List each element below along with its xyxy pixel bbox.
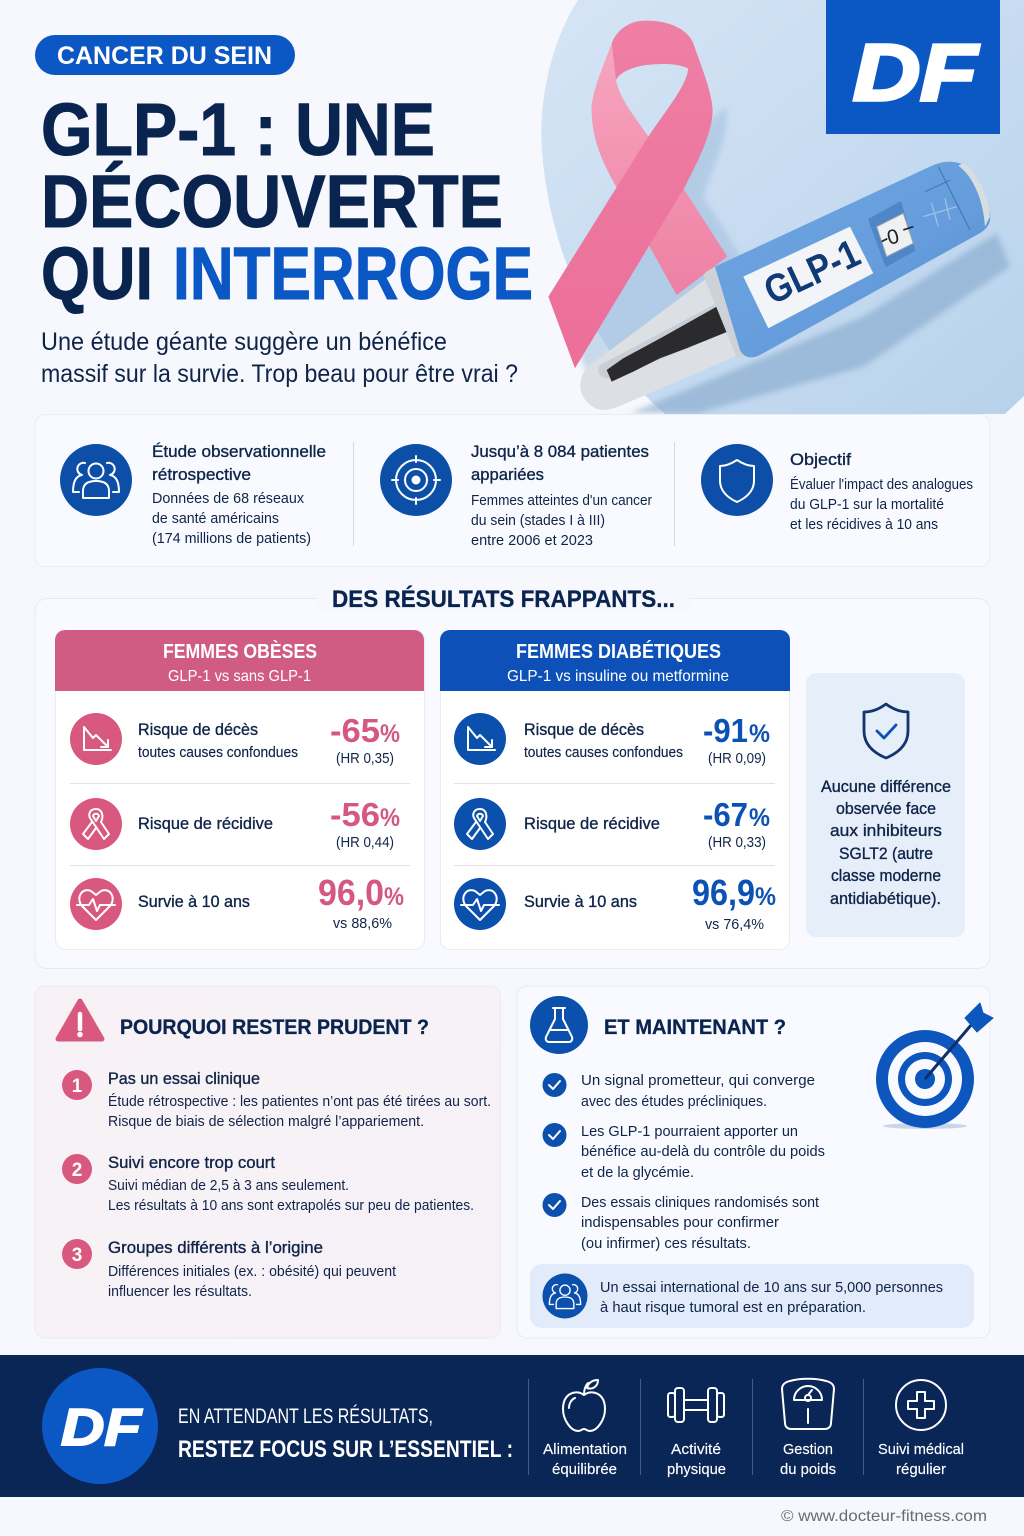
- row: death risk, diabetic: toutes causes confondues: [524, 745, 683, 761]
- callout: SGLT2 note: classe moderne: [831, 867, 941, 885]
- icon: injection pen: [580, 162, 1010, 413]
- title: GLP-1 : UNE: [41, 88, 435, 171]
- fact: observational study: rétrospective: [152, 465, 251, 484]
- point: beyond weight and glycaemia: bénéfice au-delà du contrôle du poids: [581, 1143, 825, 1160]
- callout: upcoming international trial: Un essai international de 10 ans sur 5,000 personnes: [600, 1279, 943, 1296]
- item: weight management: du poids: [780, 1461, 836, 1478]
- callout: upcoming international trial: [530, 1264, 974, 1328]
- row: 10-year survival, diabetic: %: [755, 883, 776, 911]
- callout: SGLT2 note: [806, 673, 965, 937]
- fact: observational study: [60, 442, 326, 547]
- fact: matched patients: appariées: [471, 465, 544, 484]
- icon: shield check: [864, 704, 908, 758]
- point 3: Différences initiales (ex. : obésité) qui peuvent: [108, 1264, 396, 1280]
- fact: objective: Évaluer l'impact des analogues: [790, 476, 973, 493]
- item: medical follow-up: régulier: [896, 1461, 946, 1478]
- row: 10-year survival, diabetic: vs 76,4%: [705, 917, 764, 933]
- point: beyond weight and glycaemia: et de la glycémie.: [581, 1164, 694, 1181]
- fact: objective: du GLP-1 sur la mortalité: [790, 497, 944, 513]
- point 3: influencer les résultats.: [108, 1284, 252, 1300]
- panel: what now: [517, 986, 993, 1338]
- title: [41, 88, 533, 315]
- callout: SGLT2 note: Aucune différence: [821, 778, 951, 796]
- item: weight management: [780, 1379, 836, 1478]
- fact: matched patients: du sein (stades I à III): [471, 513, 605, 529]
- icon: flask: [530, 996, 588, 1054]
- row: death risk, diabetic: -91: [703, 712, 748, 749]
- item: weight management: Gestion: [783, 1441, 833, 1458]
- row: recurrence risk, obese: (HR 0,44): [336, 835, 394, 851]
- footer message: [178, 1405, 513, 1463]
- point: randomised trials needed: Des essais cliniques randomisés sont: [581, 1194, 820, 1211]
- icon: injection pen: GLP-1: [758, 231, 867, 313]
- row: recurrence risk, diabetic: Risque de récidive: [524, 814, 660, 833]
- fact: matched patients: entre 2006 et 2023: [471, 533, 593, 549]
- heading: why be cautious: POURQUOI RESTER PRUDENT ?: [120, 1016, 429, 1039]
- logo: DF square: DF: [853, 28, 979, 117]
- row: recurrence risk, diabetic: %: [749, 804, 770, 832]
- callout: SGLT2 note: aux inhibiteurs: [830, 822, 942, 840]
- point 2: 2: [72, 1160, 82, 1181]
- row: 10-year survival, obese: %: [384, 883, 404, 911]
- fact: observational study: (174 millions de patients): [152, 531, 311, 547]
- row: death risk, diabetic: [454, 712, 770, 767]
- fact: matched patients: [380, 442, 652, 549]
- point 1: Étude rétrospective : les patientes n’ont pas été tirées au sort.: [108, 1093, 491, 1110]
- logo: DF square: [826, 0, 1000, 134]
- point 1: Risque de biais de sélection malgré l’appariement.: [108, 1114, 424, 1130]
- row: death risk, diabetic: Risque de décès: [524, 720, 644, 739]
- icon: pink ribbon: [548, 21, 743, 373]
- point: randomised trials needed: (ou infirmer) ces résultats.: [581, 1235, 751, 1252]
- row: death risk, obese: [70, 712, 400, 767]
- heading: what now: ET MAINTENANT ?: [604, 1016, 786, 1039]
- footer band: [0, 1355, 1024, 1497]
- icon: injection pen: 0: [885, 225, 902, 250]
- row: death risk, diabetic: %: [749, 720, 770, 748]
- row: death risk, obese: toutes causes confondues: [138, 745, 298, 761]
- item: balanced diet: Alimentation: [543, 1441, 627, 1458]
- point 1: 1: [72, 1076, 83, 1097]
- point 2: Les résultats à 10 ans sont extrapolés sur peu de patientes.: [108, 1198, 474, 1214]
- category pill: [35, 35, 295, 75]
- row: 10-year survival, obese: vs 88,6%: [333, 916, 392, 932]
- row: 10-year survival, obese: Survie à 10 ans: [138, 892, 250, 911]
- row: recurrence risk, diabetic: (HR 0,33): [708, 835, 766, 851]
- copyright: © www.docteur-fitness.com: [781, 1508, 987, 1525]
- point: randomised trials needed: [542, 1193, 820, 1252]
- panel: why be cautious: [35, 986, 500, 1338]
- point 3: Groupes différents à l’origine: [108, 1239, 323, 1257]
- fact: matched patients: Jusqu’à 8 084 patientes: [471, 442, 649, 461]
- card: obese women: [55, 630, 424, 950]
- row: recurrence risk, obese: %: [380, 804, 400, 832]
- row: death risk, obese: Risque de décès: [138, 720, 258, 739]
- point: promising signal: Un signal prometteur, qui converge: [581, 1072, 815, 1089]
- panel: results: [35, 585, 990, 968]
- card: obese women: GLP-1 vs sans GLP-1: [168, 668, 311, 685]
- row: 10-year survival, obese: 96,0: [318, 872, 384, 913]
- fact: objective: Objectif: [790, 450, 851, 469]
- row: recurrence risk, obese: [70, 796, 400, 851]
- row: 10-year survival, diabetic: Survie à 10 ans: [524, 892, 637, 911]
- card: obese women: FEMMES OBÈSES: [163, 640, 317, 663]
- icon: warning triangle: [58, 1001, 102, 1039]
- subtitle: Une étude géante suggère un bénéfice: [41, 328, 447, 356]
- callout: SGLT2 note: observée face: [836, 800, 936, 818]
- row: death risk, diabetic: (HR 0,09): [708, 751, 766, 767]
- category pill: CANCER DU SEIN: [57, 42, 272, 70]
- item: balanced diet: équilibrée: [552, 1461, 617, 1478]
- row: recurrence risk, obese: -56: [330, 796, 380, 833]
- point 3: [62, 1239, 396, 1300]
- point: promising signal: [542, 1072, 815, 1110]
- row: death risk, obese: -65: [330, 712, 380, 749]
- callout: upcoming international trial: à haut risque tumoral est en préparation.: [600, 1299, 866, 1316]
- point 3: 3: [72, 1245, 82, 1266]
- row: recurrence risk, diabetic: -67: [703, 796, 748, 833]
- item: physical activity: Activité: [671, 1441, 721, 1458]
- panel: study facts: [35, 414, 990, 566]
- footer message: RESTEZ FOCUS SUR L’ESSENTIEL :: [178, 1436, 513, 1463]
- fact: objective: et les récidives à 10 ans: [790, 517, 938, 533]
- row: death risk, obese: (HR 0,35): [336, 751, 394, 767]
- title: INTERROGE: [173, 232, 533, 315]
- subtitle: [41, 328, 518, 388]
- fact: observational study: Étude observationnelle: [152, 442, 326, 461]
- card: diabetic women: GLP-1 vs insuline ou metformine: [507, 668, 729, 685]
- row: recurrence risk, diabetic: [454, 796, 770, 851]
- card: diabetic women: FEMMES DIABÉTIQUES: [516, 640, 721, 663]
- row: death risk, obese: %: [380, 720, 400, 748]
- card: diabetic women: [440, 630, 790, 950]
- fact: matched patients: Femmes atteintes d'un cancer: [471, 493, 652, 509]
- subtitle: massif sur la survie. Trop beau pour être vrai ?: [41, 360, 518, 388]
- callout: SGLT2 note: SGLT2 (autre: [839, 845, 933, 863]
- point: beyond weight and glycaemia: Les GLP-1 pourraient apporter un: [581, 1123, 798, 1140]
- title: DÉCOUVERTE: [41, 160, 503, 243]
- icon: target with dart: [876, 1003, 993, 1129]
- heading: results: DES RÉSULTATS FRAPPANTS...: [332, 585, 675, 613]
- point: beyond weight and glycaemia: [542, 1123, 825, 1181]
- item: medical follow-up: Suivi médical: [878, 1441, 964, 1458]
- point 2: Suivi encore trop court: [108, 1154, 275, 1172]
- point 2: Suivi médian de 2,5 à 3 ans seulement.: [108, 1178, 349, 1194]
- item: medical follow-up: [878, 1380, 964, 1478]
- item: physical activity: [667, 1388, 726, 1478]
- fact: observational study: Données de 68 réseaux: [152, 491, 305, 507]
- point 1: [62, 1070, 491, 1130]
- hero illustration: ribbon and GLP-1 pen: [541, 0, 1024, 414]
- fact: objective: [701, 444, 973, 533]
- row: 10-year survival, obese: [70, 872, 404, 932]
- point: randomised trials needed: indispensables pour confirmer: [581, 1214, 779, 1231]
- point 2: [62, 1154, 474, 1214]
- row: 10-year survival, diabetic: 96,9: [692, 872, 755, 913]
- item: physical activity: physique: [667, 1461, 726, 1478]
- point 1: Pas un essai clinique: [108, 1070, 260, 1088]
- logo: DF circle: DF: [61, 1399, 142, 1457]
- item: balanced diet: [543, 1380, 627, 1478]
- row: recurrence risk, obese: Risque de récidive: [138, 814, 273, 833]
- callout: SGLT2 note: antidiabétique).: [830, 890, 941, 908]
- point: promising signal: avec des études précliniques.: [581, 1093, 767, 1110]
- row: 10-year survival, diabetic: [454, 872, 776, 933]
- fact: observational study: de santé américains: [152, 511, 279, 527]
- logo: DF circle: [42, 1368, 158, 1484]
- title: QUI: [41, 232, 153, 315]
- footer message: EN ATTENDANT LES RÉSULTATS,: [178, 1405, 433, 1428]
